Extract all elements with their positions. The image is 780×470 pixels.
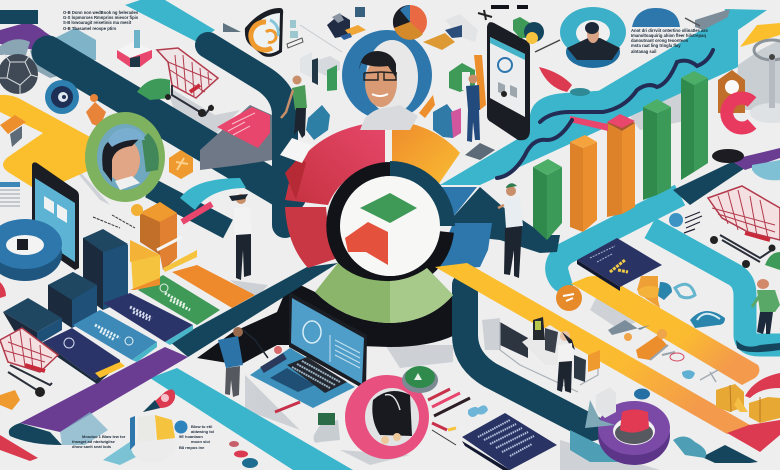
- icons: small coins: [229, 441, 258, 468]
- icon: blue eye: [45, 80, 79, 114]
- band: purple lower-left: [20, 347, 188, 432]
- ring: bottom-left blue: [0, 219, 62, 281]
- block: yellow cube: [130, 240, 160, 290]
- white core: [340, 176, 440, 276]
- line: wavy trend upper: [540, 50, 713, 122]
- icon: blue badge with lines: [669, 212, 702, 233]
- text block: top-left legend: O-B Donn non wedBook ng helerades: [63, 10, 139, 15]
- band: teal lower loop: [557, 195, 680, 283]
- text block: bottom middle legend: Blow to etil: [191, 424, 212, 429]
- marks: pink lines: [428, 389, 470, 445]
- band: navy right: [673, 158, 745, 205]
- icon: orange ball: [556, 285, 582, 311]
- band: light teal right: [752, 160, 780, 180]
- chart: isometric stair blocks: [3, 202, 255, 384]
- bar 3 orange: [607, 114, 635, 217]
- icon: bars cluster: [300, 52, 340, 91]
- icon: pink pen: [275, 402, 300, 412]
- person: white shirt center-left: [229, 194, 252, 280]
- black ring: [333, 169, 447, 283]
- text block: bottom middle legend: moon sloi: [191, 439, 210, 444]
- icon: white box and blue disc: [585, 387, 650, 428]
- scene: machine with woman: [500, 317, 600, 393]
- text block: top-left legend: S-B lowoaragit reisetinis ma mesit: [63, 20, 132, 25]
- icon: shopping cart top: [157, 48, 218, 117]
- icon: blue fans: [658, 282, 725, 328]
- ring: purple with red hat: [598, 401, 670, 465]
- laptop: [250, 293, 367, 408]
- icon: plane: [478, 10, 492, 20]
- panel: pink screen: [200, 105, 272, 170]
- arrow: pink brush: [182, 204, 212, 222]
- text block: top-right paragraph: msta raat ling tringla flay: [631, 43, 681, 48]
- arrow: pink strip: [570, 116, 608, 131]
- icon: red pin: [143, 390, 175, 412]
- bar 4 green: [643, 99, 671, 200]
- tile: orange: [172, 265, 255, 308]
- shape: white cylinder: [103, 415, 175, 465]
- red sector lower: [285, 207, 338, 268]
- shape: grey-teal dome left: [0, 39, 75, 78]
- icon: orange hex small: [0, 390, 20, 410]
- icon: green dome: [137, 78, 170, 100]
- cart: right: [708, 186, 780, 268]
- icon: grey arrow block top right: [685, 9, 730, 30]
- chart: central donut: [285, 120, 560, 323]
- phone: left tablet: [32, 162, 79, 270]
- icon: soccer ball: [0, 54, 38, 94]
- band: top teal: [125, 0, 215, 42]
- tile: green: [138, 275, 220, 325]
- callout: small text block bottom-left: thnaget ad nbelwigilse: [72, 439, 116, 444]
- avatar: green ring with boy: [85, 112, 165, 202]
- icon: blue knot: [468, 405, 488, 417]
- person: blue shirt man: [218, 327, 285, 397]
- icon: pie small: [393, 5, 427, 40]
- band: long yellow: [435, 263, 750, 434]
- band: teal base lower: [570, 430, 620, 462]
- text block: bottom middle legend: B8 rmpos ine: [179, 445, 205, 450]
- navy ring: [390, 169, 447, 226]
- shape: red tile bottom-left: [0, 435, 38, 461]
- callout: small text block bottom-left: Moodoo 1 Blaw lew tor: [82, 434, 126, 439]
- orange sector: [392, 120, 460, 185]
- text block: top-right paragraph: danoutnant orong teoonteon: [631, 38, 689, 43]
- icon: pink mark: [0, 282, 6, 298]
- document: dark panel with gold: [577, 238, 662, 291]
- avatar: teal ring and bust: [535, 7, 626, 68]
- text block: bottom middle legend: 9E hoanlaon: [179, 434, 203, 439]
- phone: right main: [487, 22, 530, 140]
- shape: black shadow behind laptop: [197, 280, 455, 365]
- phone: shield app: [245, 8, 283, 57]
- dark navy block right of donut: [453, 187, 560, 253]
- icon: red cube: [117, 30, 152, 67]
- band: navy upper curve: [208, 45, 285, 225]
- icon: navy gear: [355, 7, 365, 17]
- cart: left: [0, 328, 58, 397]
- icon: grey triangle top: [223, 23, 241, 32]
- icon: blue half dome: [632, 8, 680, 27]
- shape: dark navy oval right: [712, 149, 744, 163]
- arrow: red upper right: [745, 373, 780, 398]
- text block: top-right paragraph: Anot dri dirrviit ontertino ollinatles aks: [631, 28, 709, 33]
- avatar: top centre ring: [342, 30, 432, 130]
- icon: gold object: [637, 276, 662, 308]
- text block: top-right paragraph: Imanoltoaquirig ahion fleer hilstrepaq: [631, 33, 706, 38]
- shape: red leaf: [539, 67, 572, 92]
- text block: top-left legend: G-S lopmorxes Rmnprins miesor fipis: [63, 15, 139, 20]
- block tall: [83, 229, 128, 310]
- text block: bottom middle legend: [174, 420, 214, 450]
- shape: green mound right: [765, 252, 780, 270]
- icon: green device: [314, 413, 340, 443]
- blue sector lower: [440, 223, 492, 270]
- icon: orange hex with flower: [718, 70, 745, 113]
- band: yellow left: [0, 95, 92, 190]
- shape: teal oval: [570, 88, 590, 96]
- lamp: grey stand: [735, 40, 780, 123]
- person: man with cap: [498, 183, 523, 278]
- band: navy short: [150, 188, 228, 229]
- band: teal small arc near person: [180, 178, 246, 210]
- text block: top-right paragraph: [631, 28, 709, 54]
- icon: red C: [727, 98, 752, 128]
- bar 2 orange: [570, 135, 597, 232]
- tile: dark indigo: [103, 293, 193, 345]
- shape: teal panel: [55, 28, 96, 60]
- chart: isometric bars: [533, 71, 708, 240]
- text block: top-left legend: O-B Tbasamel reospe ptirs: [63, 26, 117, 31]
- person: orange figure: [86, 94, 106, 127]
- green sector: [315, 263, 453, 323]
- band: purple top-left: [0, 23, 60, 50]
- tile: blue: [73, 310, 157, 362]
- icon: camera device: [327, 13, 366, 40]
- arrow: white stick: [157, 237, 182, 250]
- shape: yellow wedge top-right: [740, 23, 780, 47]
- band: navy lower right curve: [465, 285, 592, 428]
- icon: green disc: [402, 366, 438, 393]
- line: wavy trend lower: [497, 120, 572, 178]
- shape: navy wedge bottom right: [702, 445, 758, 463]
- block: yellow dotted pieces: [93, 204, 143, 228]
- text block: top-right paragraph: alntanag sail: [631, 49, 656, 54]
- callout: small text block bottom-left: [60, 412, 126, 449]
- soft grey shadows: [65, 70, 690, 470]
- block: navy top-left corner: [0, 10, 38, 24]
- cube logo: [345, 193, 417, 265]
- icon: green block: [513, 17, 544, 44]
- band: big teal arrow: [440, 9, 767, 185]
- band: navy tail: [9, 423, 62, 445]
- band: navy lower-left: [170, 263, 338, 357]
- icon: orange board: [423, 14, 478, 50]
- marks: top black bars: [491, 5, 528, 9]
- icon: orange hex: [169, 150, 193, 179]
- block mid: [48, 272, 97, 328]
- coins: gold stacks: [716, 384, 780, 423]
- band: second yellow: [570, 276, 759, 385]
- block: brown orange cube: [140, 202, 197, 272]
- bar 5 green: [681, 71, 708, 180]
- icons: small blue symbols: [682, 370, 718, 382]
- block: orange bench: [0, 115, 26, 147]
- document: dark text sheet: [462, 413, 557, 470]
- red sector upper: [285, 122, 385, 205]
- icon: small grey objects: [287, 20, 342, 52]
- text block: top-left legend: [63, 10, 139, 31]
- ring: pink avatar bottom: [345, 375, 429, 459]
- text block: bottom middle legend: aldwsing tol: [191, 429, 214, 434]
- callout: small text block bottom-left: dhow saelt seat lods: [72, 444, 112, 449]
- person: green man right: [752, 279, 780, 334]
- person: green shirt: [280, 76, 330, 163]
- band: navy diagonal top: [48, 52, 290, 196]
- blue sector triangle: [440, 187, 477, 217]
- band: teal right loop: [650, 228, 780, 345]
- dark red notch: [285, 156, 306, 200]
- bar 1 green: [533, 159, 562, 240]
- band: teal curve under phone: [530, 90, 610, 140]
- table: small grid left: [0, 182, 20, 206]
- band: bottom teal: [150, 368, 353, 470]
- block low: [3, 298, 62, 345]
- arrow: red lower right: [727, 420, 780, 452]
- shape: navy wave right: [736, 340, 780, 352]
- scene: orange cart: [608, 320, 684, 361]
- band: purple right: [730, 148, 780, 170]
- tile: navy: [43, 328, 125, 384]
- shape: teal splash bottom right: [673, 436, 706, 458]
- person: woman in blue: [419, 55, 495, 160]
